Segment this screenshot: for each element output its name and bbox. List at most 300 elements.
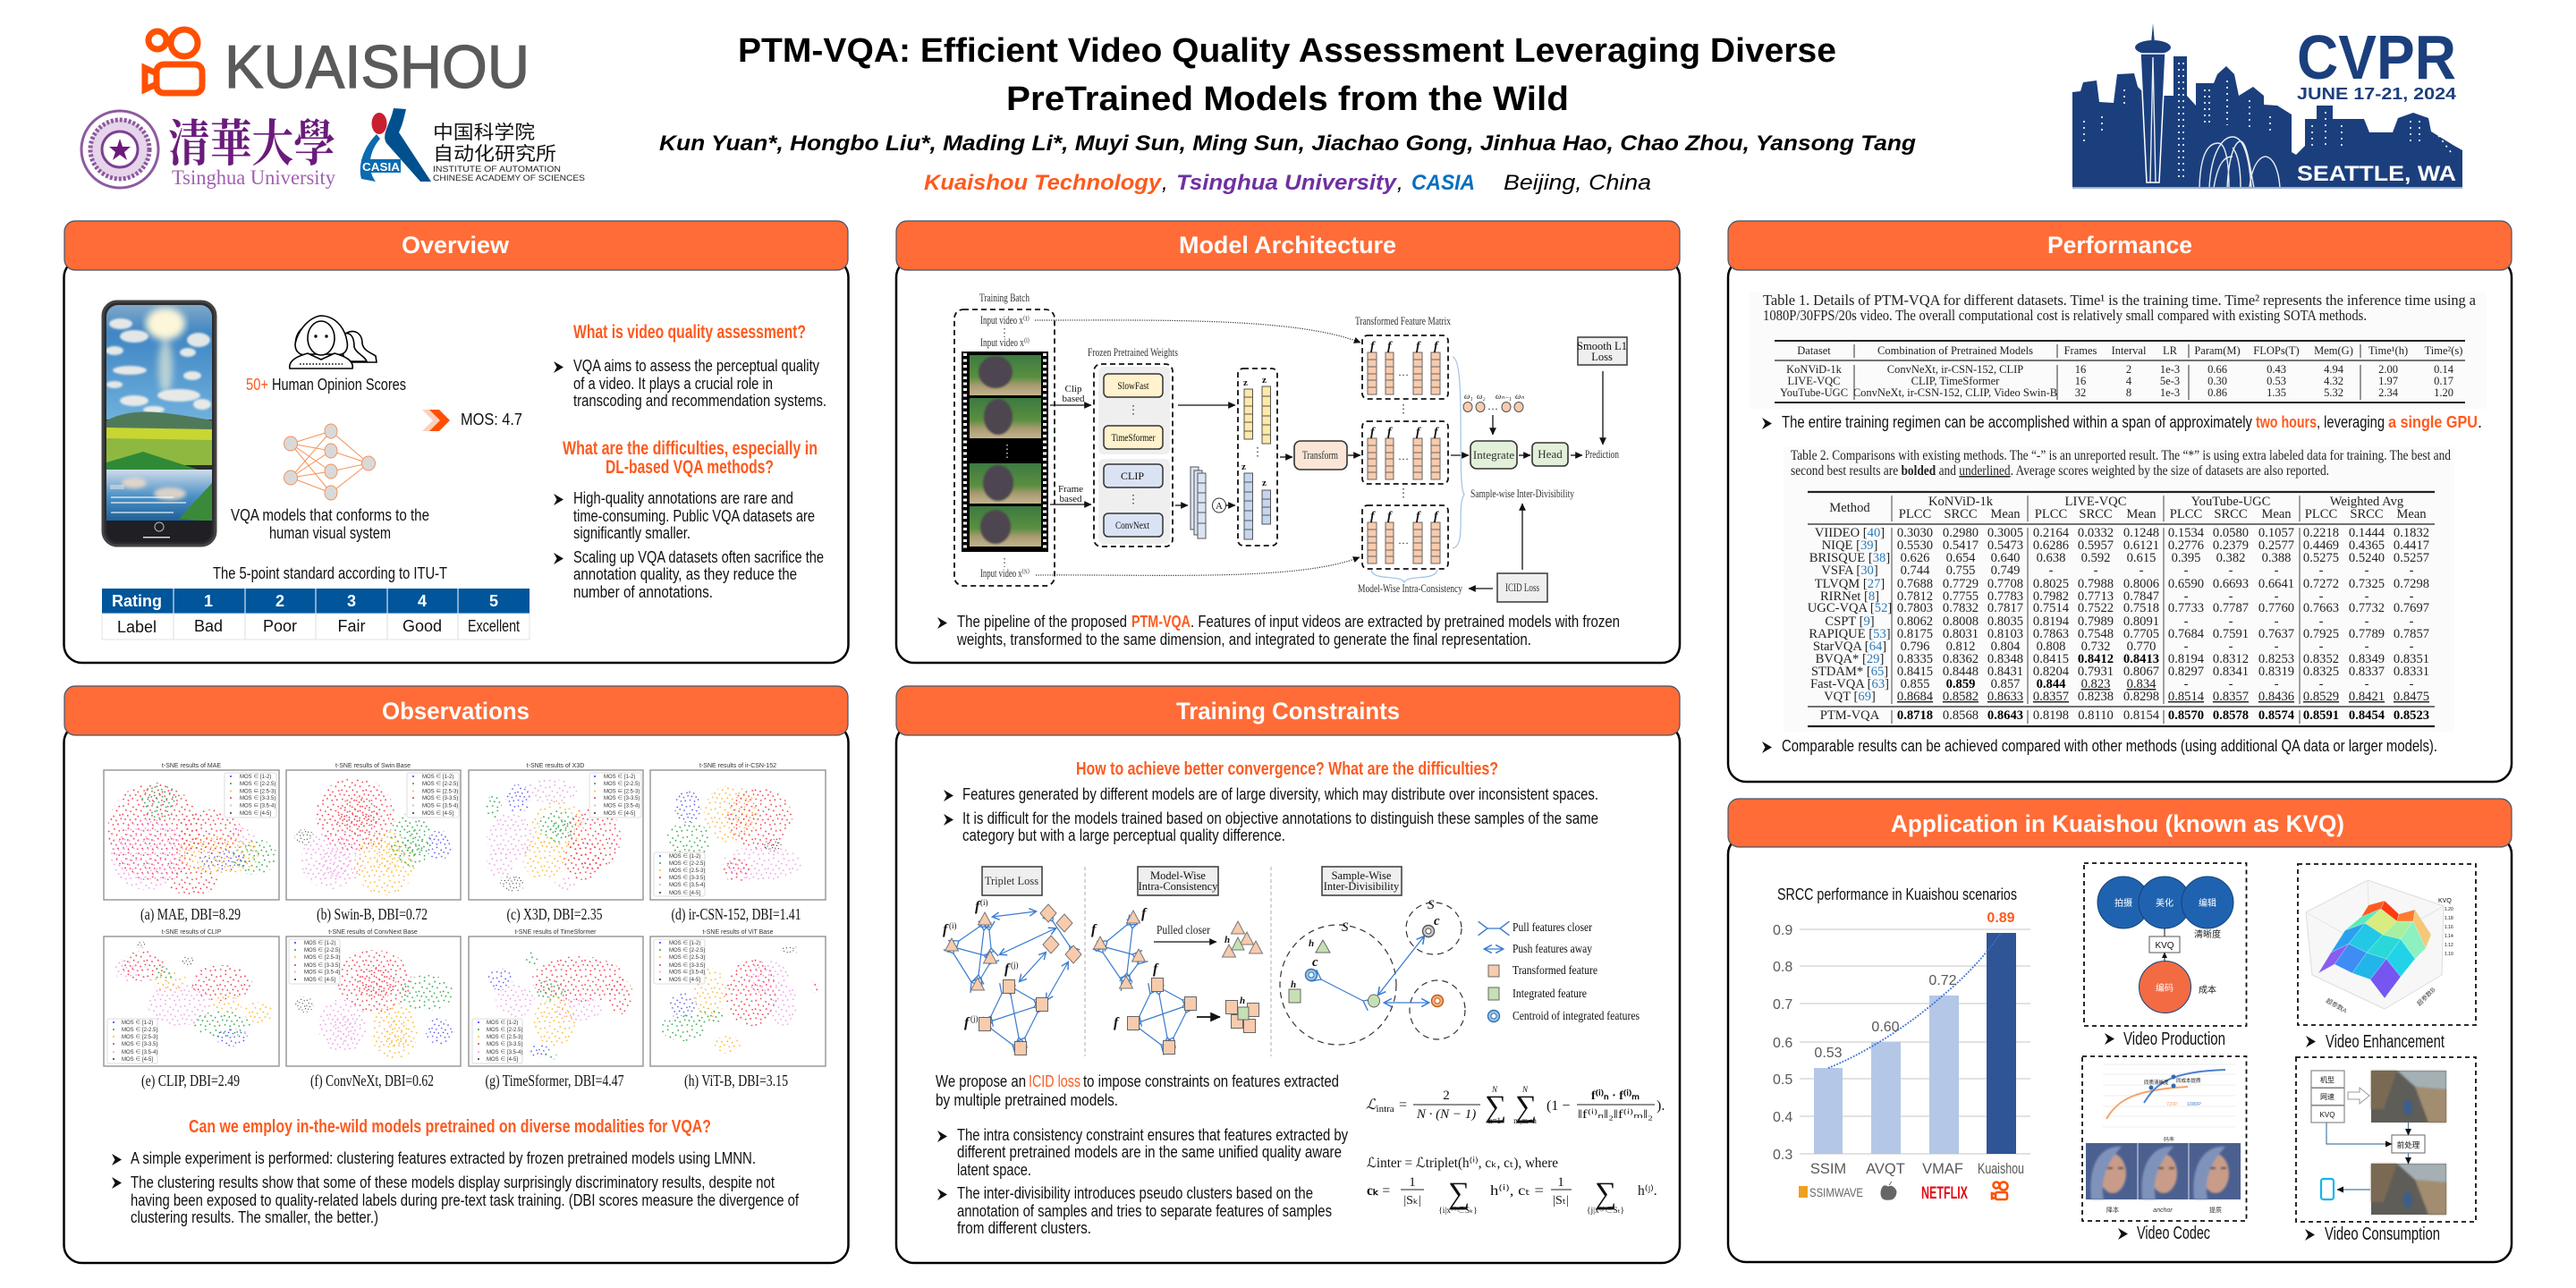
table 2: comparisons with existing methods: 0.7708 (1987, 577, 2023, 591)
diagram: triplet loss: (j) (970, 1014, 979, 1023)
table 2 caption: second best results are bolded and underlined. Average scores weighted by the size of datasets are also reported. (1791, 463, 2329, 479)
table: ITU-T rating scale: Fair (338, 617, 366, 635)
logos: SSIMWAVE, Apple, Netflix, Kuaishou: SSIMWAVE (1809, 1185, 1863, 1199)
chart: SRCC performance bars: VMAF (1922, 1161, 1963, 1177)
table 2: comparisons with existing methods: 0.5417 (1943, 538, 1979, 553)
figure: video codec: 降本 (2106, 1206, 2119, 1214)
figure: video production: 拍摄 (2114, 897, 2132, 909)
text: ICID loss proposal: ICID loss (1029, 1072, 1080, 1090)
table 2: comparisons with existing methods: 0.7729 (1943, 577, 1979, 591)
logo: Kuaishou: KUAISHOU (225, 33, 530, 101)
diagram: triplet loss: f (1004, 962, 1011, 977)
table 2: comparisons with existing methods: - (2275, 640, 2279, 654)
table 2: comparisons with existing methods: 0.857 (1991, 677, 2020, 691)
chart: t-SNE X3D: MOS ∈ [2.5-3) (604, 789, 640, 794)
table 2: comparisons with existing methods: - (2410, 677, 2414, 691)
table 2: comparisons with existing methods: 0.7832 (1943, 601, 1979, 615)
diagram: PTM-VQA pipeline: SlowFast (1118, 379, 1149, 392)
title (738, 32, 1836, 118)
formula: L inter: cₖ = (1367, 1183, 1390, 1199)
diagram: sample-wise inter-divisibility: h (1309, 938, 1314, 949)
chart: t-SNE MAE: MOS ∈ [3-3.5) (240, 796, 275, 801)
diagram: triplet loss: Triplet Loss (985, 875, 1038, 887)
table 2: comparisons with existing methods: Mean (2261, 507, 2292, 521)
panel: Model Architecture (896, 221, 1680, 663)
table 2: comparisons with existing methods: 0.5275 (2303, 551, 2339, 565)
table 2: comparisons with existing methods: 0.8523 (2394, 708, 2429, 723)
diagram: PTM-VQA pipeline: f (1434, 426, 1439, 439)
table 2: comparisons with existing methods: 0.8062 (1897, 614, 1933, 629)
table 1: PTM-VQA details: 1.35 (2267, 386, 2286, 399)
table 2: comparisons with existing methods: 0.749 (1991, 564, 2020, 578)
table 2: comparisons with existing methods: 0.6641 (2258, 577, 2294, 591)
table 2: comparisons with existing methods: 0.4365 (2349, 538, 2385, 553)
affiliations: , (1162, 171, 1168, 195)
diagram: PTM-VQA pipeline: ω₂ (1477, 392, 1485, 401)
text: 50+ human opinion scores: Human Opinion Scores (272, 376, 406, 394)
chart: t-SNE ir-CSN-152: MOS ∈ [2.5-3) (669, 869, 705, 874)
diagram: PTM-VQA pipeline: Frame (1058, 484, 1083, 495)
chart: t-SNE ViT-B: MOS ∈ [3-3.5) (669, 963, 705, 969)
table 2: comparisons with existing methods: 0.8035 (1987, 614, 2023, 629)
chart: t-SNE CLIP: MOS ∈ [2-2.5) (122, 1028, 157, 1033)
table 2: comparisons with existing methods: 0.8684 (1897, 690, 1934, 704)
table 1: PTM-VQA details: 0.66 (2207, 363, 2227, 376)
table 2: comparisons with existing methods: 0.8568 (1943, 708, 1979, 723)
table 2: comparisons with existing methods: 0.859 (1946, 677, 1975, 691)
table 2: comparisons with existing methods: 0.7931 (2078, 665, 2114, 679)
diagram: PTM-VQA pipeline: based (1059, 494, 1082, 504)
figure: video enhancement surface: 超参数A (2325, 996, 2349, 1015)
table 2: comparisons with existing methods: 0.755 (1946, 564, 1975, 578)
figure: video production: 编辑 (2199, 897, 2216, 909)
logos: SSIMWAVE, Apple, Netflix, Kuaishou: NETFLIX (1921, 1184, 1968, 1203)
chart: t-SNE ir-CSN-152: MOS ∈ [2-2.5) (669, 861, 705, 867)
chart: SRCC performance bars: 0.72 (1928, 973, 1957, 988)
diagram: PTM-VQA pipeline: Input video x⁽ⁱ⁾ (980, 336, 1030, 349)
diagram: model-wise intra-consistency: f (1153, 962, 1159, 977)
table 2: comparisons with existing methods: 0.8570 (2168, 708, 2204, 723)
table 2: comparisons with existing methods: - (2410, 614, 2414, 629)
table 2: comparisons with existing methods: 0.640 (1991, 551, 2020, 565)
table: ITU-T rating scale: 3 (347, 592, 356, 610)
diagram: PTM-VQA pipeline: ωₙ₋₁ (1496, 392, 1512, 401)
table 2: comparisons with existing methods: - (2229, 589, 2233, 604)
figure: video codec: 同质清晰度 (2144, 1079, 2169, 1086)
table 2: comparisons with existing methods: LIVE-VQC (2065, 495, 2126, 509)
diagram: PTM-VQA pipeline: Head (1538, 447, 1563, 461)
chart: t-SNE ir-CSN-152 (650, 763, 826, 923)
table: ITU-T rating scale: 1 (204, 592, 213, 610)
bullet: comparable results: Comparable results can be achieved compared with other methods (using additional QA data or larger models). (1782, 737, 2437, 755)
table: ITU-T rating scale: Poor (263, 617, 297, 635)
table: ITU-T rating scale: Label (117, 618, 157, 636)
table 2: comparisons with existing methods: 0.8031 (1943, 627, 1979, 641)
text: VQA models caption: VQA models that conforms to the (231, 506, 429, 524)
table: ITU-T rating scale: 2 (275, 592, 284, 610)
diagram: PTM-VQA pipeline: … (1487, 400, 1498, 412)
arrow: chevron to MOS (422, 410, 450, 431)
table 2: comparisons with existing methods: 0.8413 (2123, 652, 2159, 666)
bullet: two hours: , leveraging (2317, 413, 2385, 431)
table 2: comparisons with existing methods: 0.7522 (2078, 601, 2114, 615)
table 2: comparisons with existing methods: 0.8431 (1987, 665, 2023, 679)
bullet: scaling up: number of annotations. (573, 583, 713, 601)
table 2: comparisons with existing methods: 0.7783 (1987, 589, 2023, 604)
bullet: inter-divisibility: from different clusters. (957, 1219, 1091, 1237)
legend: training constraints (1485, 920, 1640, 1022)
formula: L inter: |Sₜ| (1553, 1194, 1569, 1208)
logo: CASIA: CASIA (362, 160, 401, 174)
table 2: comparisons with existing methods: - (2365, 677, 2369, 691)
bullet: intra consistency (937, 1126, 1348, 1179)
chart: t-SNE X3D: t-SNE results of X3D (527, 763, 584, 769)
text: ICID loss proposal: We propose an (936, 1072, 1026, 1090)
subheading: difficulties (563, 438, 818, 478)
legend: training constraints: Centroid of integrated features (1513, 1009, 1640, 1022)
table 2: comparisons with existing methods: SRCC (1944, 507, 1978, 521)
figure: video production: 成本 (2199, 984, 2216, 996)
table 2: comparisons with existing methods: 0.2379 (2213, 538, 2249, 553)
diagram: PTM-VQA pipeline: … (1398, 366, 1409, 378)
table 2: comparisons with existing methods: 0.3005 (1987, 526, 2023, 540)
chart: t-SNE X3D: MOS ∈ [3.5-4) (604, 803, 640, 809)
logo: CASIA: 中国科学院 (433, 123, 535, 143)
table 2: comparisons with existing methods: 0.7982 (2033, 589, 2069, 604)
table 2: comparisons with existing methods: 0.8352 (2303, 652, 2339, 666)
authors: Kun Yuan*, Hongbo Liu*, Mading Li*, Muyi Sun, Ming Sun, Jiachao Gong, Jinhua Hao, Chao Zhou, Yansong Tang (659, 131, 1916, 156)
table 2: comparisons with existing methods: 0.8643 (1987, 708, 2023, 723)
table 2: comparisons with existing methods: 0.7789 (2349, 627, 2385, 641)
table 1: PTM-VQA details (1775, 341, 2465, 402)
table 2: comparisons with existing methods: 0.744 (1901, 564, 1930, 578)
diagram: PTM-VQA pipeline: Loss (1591, 351, 1613, 363)
chart: t-SNE ConvNeXt: MOS ∈ [2-2.5) (304, 948, 340, 953)
table 2: comparisons with existing methods: 0.638 (2037, 551, 2065, 565)
table 2: comparisons with existing methods: 0.8351 (2394, 652, 2429, 666)
table 1: PTM-VQA details: 0.86 (2207, 386, 2227, 399)
table 2: comparisons with existing methods: - (2184, 640, 2189, 654)
text: ICID loss proposal: by multiple pretrained models. (936, 1091, 1118, 1109)
table 1: PTM-VQA details: 1e-3 (2160, 386, 2180, 399)
table 2: comparisons with existing methods: 0.8412 (2078, 652, 2114, 666)
film strip of video frames (962, 352, 1048, 552)
table: ITU-T rating scale: 5 (489, 592, 498, 610)
logo: CVPR 2024 Seattle: CVPR (2297, 22, 2456, 92)
table 1: PTM-VQA details: KoNViD-1k (1786, 363, 1843, 376)
formula: L inter: ∑ (1595, 1177, 1616, 1210)
table 2: comparisons with existing methods: 0.8514 (2168, 690, 2205, 704)
table 1: PTM-VQA details: FLOPs(T) (2253, 344, 2300, 357)
formula: L intra: f⁽ⁱ⁾ₙ · f⁽ⁱ⁾ₘ (1591, 1089, 1640, 1103)
table 1: PTM-VQA details: 8 (2126, 386, 2131, 399)
diagram: PTM-VQA pipeline: f (1370, 340, 1376, 353)
formula: L intra: intra (1377, 1104, 1394, 1114)
diagram: PTM-VQA pipeline: A (1216, 501, 1223, 512)
diagram: PTM-VQA pipeline: TimeSformer (1111, 431, 1156, 444)
chart: t-SNE MAE (104, 763, 279, 923)
diagram: triplet loss: (i) (980, 898, 987, 907)
table 2: comparisons with existing methods: - (2184, 564, 2189, 578)
table 2: comparisons with existing methods: 0.7732 (2349, 601, 2385, 615)
chart: t-SNE ConvNeXt: MOS ∈ [1-2) (304, 941, 335, 946)
table 1: PTM-VQA details: 4 (2126, 375, 2132, 387)
table 2: comparisons with existing methods: 0.7847 (2123, 589, 2159, 604)
chart: SRCC performance bars: 0.6 (1773, 1036, 1792, 1051)
diagram: triplet loss: f (943, 922, 949, 937)
diagram: sample-wise inter-divisibility: S (1342, 920, 1349, 935)
table: ITU-T rating scale: Good (402, 617, 442, 635)
table 2: comparisons with existing methods: 0.5473 (1987, 538, 2023, 553)
figure: video production: 美化 (2156, 897, 2174, 909)
chart: t-SNE Swin-B (286, 763, 461, 923)
diagram: model-wise intra-consistency: Intra-Consistency (1139, 880, 1218, 893)
table 2: comparisons with existing methods: 0.2776 (2168, 538, 2204, 553)
table 2: comparisons with existing methods: PLCC (2035, 507, 2067, 521)
title: PTM-VQA: Efficient Video Quality Assessment Leveraging Diverse (738, 32, 1836, 70)
heading: Overview: Overview (402, 232, 510, 258)
chart: t-SNE ir-CSN-152: MOS ∈ [3-3.5) (669, 876, 705, 881)
logo: Tsinghua University: 清華大學 (168, 105, 335, 176)
diagram: PTM-VQA pipeline: f (1416, 340, 1421, 353)
chart: t-SNE X3D: MOS ∈ [1-2) (604, 775, 635, 780)
table 2: comparisons with existing methods: - (2229, 614, 2233, 629)
table 2: comparisons with existing methods: 0.8448 (1943, 665, 1979, 679)
bullet: pipeline description: PTM-VQA (1131, 613, 1191, 631)
bullet: VQA aims: of a video. It plays a crucial role in (573, 375, 773, 393)
table 2: comparisons with existing methods: RIRNet [8] (1820, 589, 1879, 604)
logo: CVPR 2024 Seattle: JUNE 17-21, 2024 (2297, 85, 2456, 103)
bullet: inter-divisibility: The inter-divisibility introduces pseudo clusters based on the (957, 1184, 1313, 1202)
formula: L intra: ). (1657, 1098, 1665, 1114)
chart: t-SNE ConvNeXt: MOS ∈ [2.5-3) (304, 955, 340, 961)
text: 5-point standard caption: The 5-point standard according to ITU-T (213, 564, 447, 582)
chart: t-SNE TimeSformer: (g) TimeSformer, DBI=4.47 (485, 1072, 624, 1089)
table 2: comparisons with existing methods: - (2410, 640, 2414, 654)
table 2: comparisons with existing methods: 0.8319 (2258, 665, 2294, 679)
chart: t-SNE ConvNeXt (286, 929, 461, 1089)
diagram: PTM-VQA pipeline: z (1241, 462, 1246, 472)
formula: L intra: 2 (1443, 1089, 1450, 1103)
table 1: PTM-VQA details: ConvNeXt, ir-CSN-152, CLIP (1887, 363, 2023, 376)
table 1: PTM-VQA details: Combination of Pretrained Models (1877, 344, 2033, 357)
chart: t-SNE CLIP: (e) CLIP, DBI=2.49 (141, 1072, 240, 1089)
bullet: two hours: The entire training regimen can be accomplished within a span of approximately (1782, 413, 2252, 431)
chart: t-SNE Swin-B: MOS ∈ [3-3.5) (422, 796, 458, 801)
bullet: two hours: a single GPU (2388, 413, 2478, 431)
legend: training constraints: Pull features closer (1513, 920, 1592, 934)
table 2: comparisons with existing methods: 0.388 (2262, 551, 2291, 565)
table 2: comparisons with existing methods: 0.808 (2037, 640, 2065, 654)
diagram: PTM-VQA pipeline: … (1398, 450, 1409, 462)
diagram: triplet loss (943, 867, 1081, 1055)
table 2: comparisons with existing methods: VSFA [30] (1821, 564, 1878, 578)
formula: L intra: ‖f⁽ⁱ⁾ₙ‖₂‖f⁽ⁱ⁾ₘ‖₂ (1578, 1107, 1653, 1121)
text: VQA models caption: human visual system (269, 524, 391, 542)
chart: t-SNE Swin-B: MOS ∈ [4-5] (422, 811, 453, 817)
logo: CVPR 2024 Seattle: SEATTLE, WA (2297, 162, 2456, 186)
table 2: comparisons with existing methods: 0.8238 (2078, 690, 2114, 704)
formula: L inter: |Sₖ| (1403, 1194, 1421, 1208)
table 1: PTM-VQA details: YouTube-UGC (1780, 386, 1848, 399)
chart: t-SNE TimeSformer: MOS ∈ [3-3.5) (487, 1042, 522, 1047)
table 1: PTM-VQA details: LR (2163, 344, 2178, 357)
chart: t-SNE ViT-B: MOS ∈ [2-2.5) (669, 948, 705, 953)
table 2: comparisons with existing methods: 0.8194 (2168, 652, 2205, 666)
table 2: comparisons with existing methods: 0.8198 (2033, 708, 2069, 723)
chart: SRCC performance bars: SRCC performance in Kuaishou scenarios (1777, 886, 2017, 903)
chart: SRCC performance bars: AVQT (1866, 1161, 1905, 1177)
bullet: scaling up: Scaling up VQA datasets often sacrifice the (573, 548, 824, 566)
logo: CASIA: INSTITUTE OF AUTOMATION (433, 165, 561, 174)
chart: t-SNE MAE: (a) MAE, DBI=8.29 (140, 905, 241, 923)
diagram: model-wise intra-consistency: f (1114, 1015, 1120, 1030)
chart: t-SNE Swin-B: MOS ∈ [1-2) (422, 775, 453, 780)
table 2: comparisons with existing methods: 0.855 (1901, 677, 1929, 691)
diagram: PTM-VQA pipeline: Transformed Feature Matrix (1355, 314, 1451, 327)
logo: CASIA: CHINESE ACADEMY OF SCIENCES (433, 174, 585, 183)
table 2: comparisons with existing methods: - (2319, 614, 2324, 629)
table 2: comparisons with existing methods: StarVQA [64] (1813, 640, 1886, 654)
table 2: comparisons with existing methods: TLVQM [27] (1815, 577, 1885, 591)
diagram: PTM-VQA pipeline: CLIP (1121, 470, 1144, 482)
table 2: comparisons with existing methods: - (2319, 589, 2324, 604)
formula: L intra: ℒ (1366, 1097, 1377, 1113)
table 2: comparisons with existing methods: 0.732 (2081, 640, 2110, 654)
bullet: intra consistency: latent space. (957, 1161, 1031, 1179)
table 2: comparisons with existing methods: 0.8436 (2258, 690, 2294, 704)
diagram: PTM-VQA pipeline: Model-Wise Intra-Consistency (1358, 581, 1462, 595)
table 2: comparisons with existing methods: 0.804 (1991, 640, 2021, 654)
table 2: comparisons with existing methods: 0.7925 (2303, 627, 2339, 641)
table 2: comparisons with existing methods: 0.1248 (2123, 526, 2159, 540)
table 2: comparisons with existing methods: - (2049, 564, 2054, 578)
diagram: triplet loss: f (975, 899, 981, 914)
label: video enhancement: Video Enhancement (2326, 1032, 2445, 1052)
chart: t-SNE CLIP: MOS ∈ [4-5] (122, 1057, 153, 1063)
heading: Application in Kuaishou: Application in Kuaishou (known as KVQ) (1891, 810, 2344, 837)
diagram: PTM-VQA pipeline: Input video x⁽ᴺ⁾ (980, 567, 1030, 580)
label: video codec: Video Codec (2137, 1224, 2210, 1243)
bullet: high-quality annotations: significantly smaller. (573, 524, 691, 542)
diagram: PTM-VQA pipeline: Input video x⁽¹⁾ (980, 314, 1030, 326)
table 2: comparisons with existing methods: 0.395 (2172, 551, 2200, 565)
chart: SRCC performance bars: 0.53 (1814, 1046, 1843, 1061)
bullet: simple experiment: A simple experiment is performed: clustering features extracted by frozen pretrained models using LMNN. (131, 1149, 756, 1167)
table 2: comparisons with existing methods: - (2365, 640, 2369, 654)
bullet: high-quality annotations (554, 489, 815, 542)
table 2: comparisons with existing methods: PLCC (2305, 507, 2337, 521)
table 2: comparisons with existing methods: 0.7688 (1897, 577, 1933, 591)
icon: human observers (290, 316, 377, 369)
formula: L intra: N · (N − 1) (1416, 1107, 1476, 1122)
chart: t-SNE MAE: MOS ∈ [3.5-4) (240, 803, 275, 809)
chart: SRCC performance bars: 0.9 (1773, 923, 1792, 938)
table 2: comparisons with existing methods: STDAM* [65] (1811, 665, 1888, 679)
table 2: comparisons with existing methods: 0.8591 (2303, 708, 2339, 723)
table 2: comparisons with existing methods: 0.4417 (2394, 538, 2429, 553)
heading: Model Architecture: Model Architecture (1179, 232, 1396, 258)
formula: L intra: m,m≠n (1513, 1116, 1537, 1125)
table 2: comparisons with existing methods: VIIDEO [40] (1815, 526, 1885, 540)
logo: Tsinghua University (81, 105, 335, 189)
table 2: comparisons with existing methods: 0.8421 (2349, 690, 2385, 704)
text: ICID loss proposal (936, 1072, 1339, 1109)
diagram: PTM-VQA pipeline: Sample-wise Inter-Divisibility (1470, 487, 1574, 500)
table 1: PTM-VQA details: ConvNeXt, ir-CSN-152, CLIP, Video Swin-B (1853, 386, 2057, 399)
formula: L inter: {i|x⁽ⁱ⁾∈Sₖ} (1438, 1206, 1478, 1216)
table 2: comparisons with existing methods: 0.4469 (2303, 538, 2339, 553)
logo: CASIA (360, 108, 585, 183)
panel: Training Constraints (896, 686, 1680, 1263)
figure: video enhancement surface: 1.16 (2445, 925, 2453, 930)
table 2: comparisons with existing methods: 0.5530 (1897, 538, 1933, 553)
diagram: PTM-VQA pipeline: Frozen Pretrained Weights (1088, 345, 1178, 359)
subheading: question: Can we employ in-the-wild models pretrained on diverse modalities for VQA? (189, 1117, 711, 1137)
table 2: comparisons with existing methods: 0.5257 (2394, 551, 2429, 565)
table 2: comparisons with existing methods: - (2319, 677, 2324, 691)
diagram: PTM-VQA pipeline: z (1262, 375, 1267, 386)
subheading: what is VQA: What is video quality assessment? (573, 322, 806, 343)
table 1 caption: 1080P/30FPS/20s video. The overall computational cost is relatively small compared with existing SOTA methods. (1763, 307, 2367, 324)
table 2: comparisons with existing methods: 0.7591 (2213, 627, 2249, 641)
table 1: PTM-VQA details: 5.32 (2324, 386, 2343, 399)
table 2: comparisons with existing methods: 0.8331 (2394, 665, 2429, 679)
chart: t-SNE X3D: (c) X3D, DBI=2.35 (506, 905, 603, 923)
table 2: comparisons with existing methods: - (2410, 589, 2414, 604)
table 2: comparisons with existing methods: 0.7514 (2033, 601, 2070, 615)
table 2 caption (1791, 448, 2451, 479)
figure: video enhancement surface: 1.14 (2445, 934, 2453, 939)
bullet: VQA aims (554, 357, 826, 410)
table 2: comparisons with existing methods: 0.8067 (2123, 665, 2159, 679)
diagram: PTM-VQA pipeline: Transform (1302, 448, 1338, 462)
subheading: difficulties: What are the difficulties, especially in (563, 438, 818, 459)
figure: video consumption: 网速 (2320, 1093, 2334, 1101)
diagram: PTM-VQA pipeline: Prediction (1585, 447, 1619, 461)
table 2: comparisons with existing methods: Mean (1990, 507, 2021, 521)
figure: video codec: anchor (2153, 1208, 2173, 1214)
table 2: comparisons with existing methods: 0.6590 (2168, 577, 2204, 591)
diagram: sample-wise inter-divisibility: Inter-Divisibility (1324, 880, 1400, 893)
chart: t-SNE Swin-B: MOS ∈ [2.5-3) (422, 789, 458, 794)
chart: t-SNE X3D: MOS ∈ [4-5] (604, 811, 635, 817)
figure: video codec: 1080P (2187, 1102, 2201, 1107)
table 2: comparisons with existing methods: 0.8194 (2033, 614, 2070, 629)
table 2: comparisons with existing methods: Fast-VQA [63] (1810, 677, 1889, 691)
table 2: comparisons with existing methods: 0.8154 (2123, 708, 2160, 723)
table 2: comparisons with existing methods: CSPT [9] (1825, 614, 1875, 629)
formula: L inter: 1 (1557, 1175, 1564, 1190)
table: ITU-T rating scale: Excellent (468, 617, 520, 635)
table 2: comparisons with existing methods: 0.382 (2216, 551, 2245, 565)
formula: L inter: ℒinter = ℒtriplet(h⁽ⁱ⁾, cₖ, cₜ), where (1367, 1156, 1558, 1171)
table 1: PTM-VQA details: 2.34 (2378, 386, 2399, 399)
chart: t-SNE TimeSformer: t-SNE results of TimeSformer (514, 929, 597, 936)
table 2: comparisons with existing methods: 0.8325 (2303, 665, 2339, 679)
table 2: comparisons with existing methods: 0.8357 (2213, 690, 2249, 704)
table 2: comparisons with existing methods: BRISQUE [38] (1809, 551, 1890, 565)
chart: SRCC performance bars: 0.4 (1773, 1110, 1792, 1125)
chart: t-SNE ViT-B: MOS ∈ [3.5-4) (669, 970, 705, 975)
table 2: comparisons with existing methods: 0.1444 (2349, 526, 2385, 540)
panel: Performance (1728, 221, 2512, 782)
table 2: comparisons with existing methods: 0.8454 (2349, 708, 2385, 723)
bullet: clustering results: clustering results. The smaller, the better.) (131, 1208, 378, 1226)
diagram: PTM-VQA pipeline: f (1370, 510, 1376, 523)
chart: t-SNE CLIP: MOS ∈ [3.5-4) (122, 1050, 157, 1055)
table 1: PTM-VQA details: 1.20 (2434, 386, 2453, 399)
